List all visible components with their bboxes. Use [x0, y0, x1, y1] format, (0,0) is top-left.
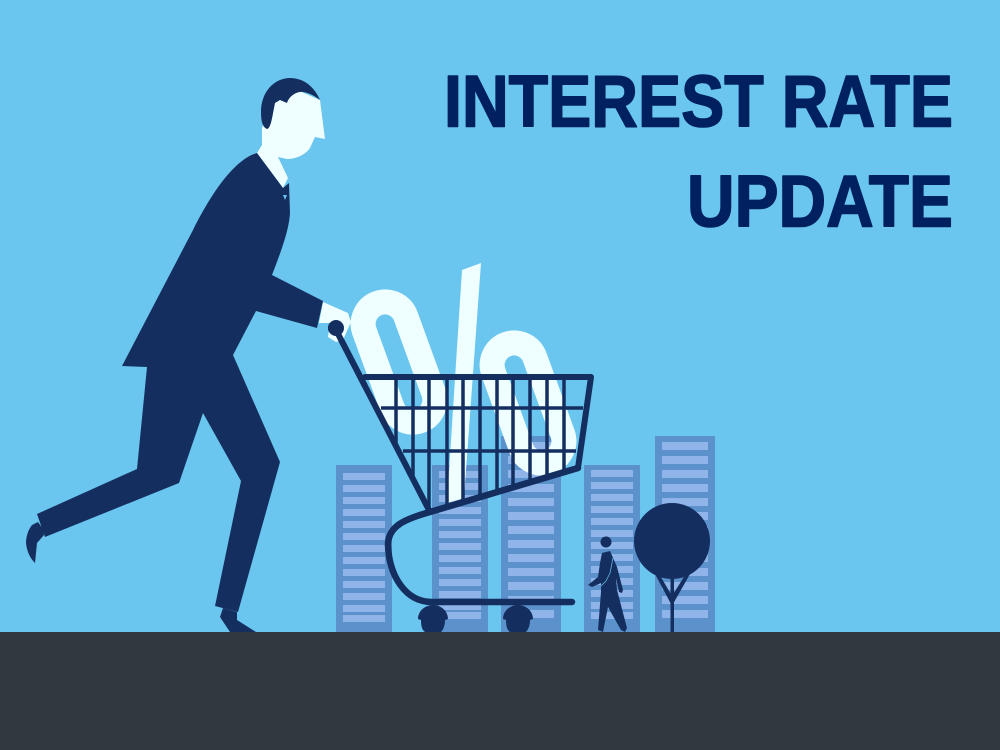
face and neck	[257, 90, 325, 188]
front shoe	[220, 608, 256, 632]
cart wheels	[418, 605, 533, 632]
building 3	[501, 436, 561, 632]
hand	[319, 302, 351, 342]
ground	[0, 632, 1000, 750]
shopping cart	[328, 320, 591, 632]
small walking person	[588, 536, 627, 632]
tree	[634, 503, 710, 632]
building 2	[432, 465, 488, 632]
building 1	[336, 465, 392, 632]
percent sign	[357, 263, 570, 503]
businessman	[26, 78, 351, 632]
cart frame	[365, 377, 591, 512]
building 4	[584, 465, 640, 632]
title: UPDATE	[687, 162, 953, 242]
hand grip	[328, 320, 344, 336]
hair	[261, 78, 320, 129]
building 5	[655, 436, 715, 632]
title	[444, 62, 953, 242]
back shoe	[26, 522, 44, 563]
suit	[37, 153, 323, 612]
cart handle over hand	[328, 320, 365, 386]
tie	[283, 195, 287, 200]
cart grid	[381, 377, 583, 512]
